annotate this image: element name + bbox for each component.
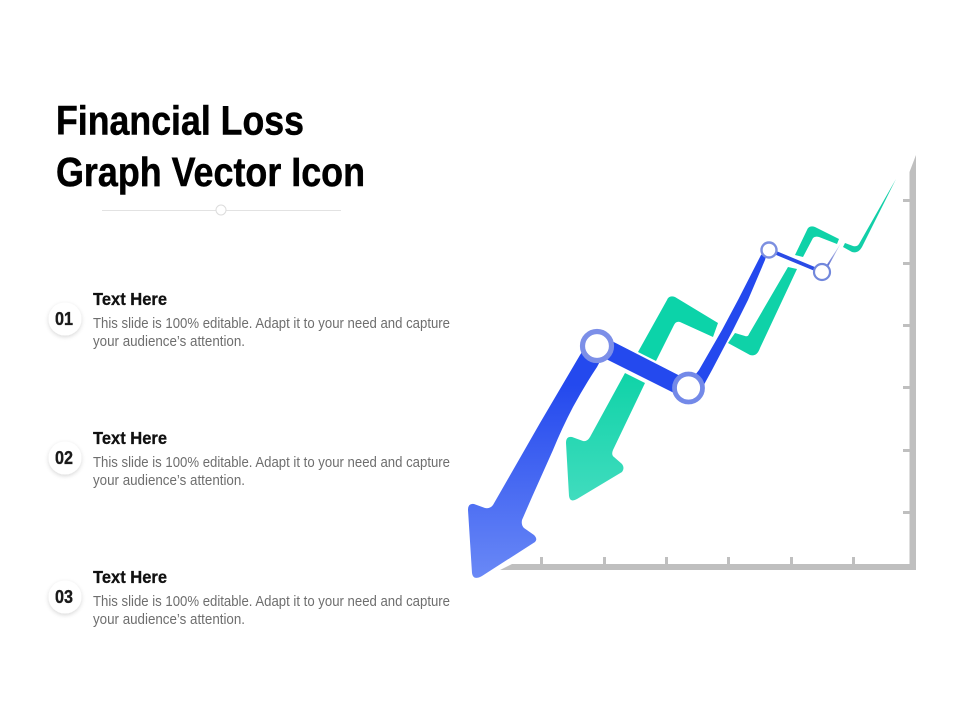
green segment middle	[728, 267, 797, 355]
number badge 02	[48, 442, 82, 474]
number badge 01	[48, 302, 82, 336]
green segment upper left	[638, 296, 718, 361]
title divider	[102, 205, 341, 215]
green arrow head and shaft	[566, 373, 645, 500]
list item 02	[48, 428, 450, 489]
number badge 02: 02	[55, 448, 73, 468]
chart: financial loss graph	[468, 155, 916, 578]
green tail spike	[843, 179, 896, 252]
chart axes with tick marks	[500, 155, 916, 570]
thin faded line	[827, 243, 841, 266]
item 03 body: This slide is 100% editable. Adapt it to your need and capture	[93, 593, 450, 610]
item 02 body	[93, 454, 450, 489]
node large right	[674, 374, 702, 402]
blue segment rising	[685, 250, 768, 392]
blue arrow line	[468, 242, 841, 578]
item 03 body: your audience’s attention.	[93, 611, 245, 628]
blue segment between large nodes	[592, 335, 688, 396]
number badge 03	[48, 580, 82, 614]
list item 03	[48, 567, 450, 628]
title: Financial Loss	[56, 98, 304, 144]
list item 01	[48, 289, 450, 350]
title	[56, 98, 365, 195]
item 02 heading: Text Here	[93, 428, 167, 448]
item 01 body: This slide is 100% editable. Adapt it to your need and capture	[93, 315, 450, 332]
blue arrow head and shaft	[468, 340, 606, 578]
node small upper	[762, 242, 776, 258]
item 02 body: your audience’s attention.	[93, 472, 245, 489]
item 03 body	[93, 593, 450, 628]
number badge 03: 03	[55, 587, 73, 607]
node small right	[814, 264, 830, 280]
green arrow line	[566, 179, 896, 500]
blue segment between small nodes	[769, 248, 822, 274]
item 01 heading: Text Here	[93, 289, 167, 309]
item 03 heading: Text Here	[93, 567, 167, 587]
green segment top	[795, 226, 839, 257]
node large left	[582, 332, 612, 360]
number badge 01: 01	[55, 309, 73, 329]
item 02 body: This slide is 100% editable. Adapt it to your need and capture	[93, 454, 450, 471]
title: Graph Vector Icon	[56, 149, 365, 195]
item 01 body: your audience’s attention.	[93, 333, 245, 350]
item 01 body	[93, 315, 450, 350]
